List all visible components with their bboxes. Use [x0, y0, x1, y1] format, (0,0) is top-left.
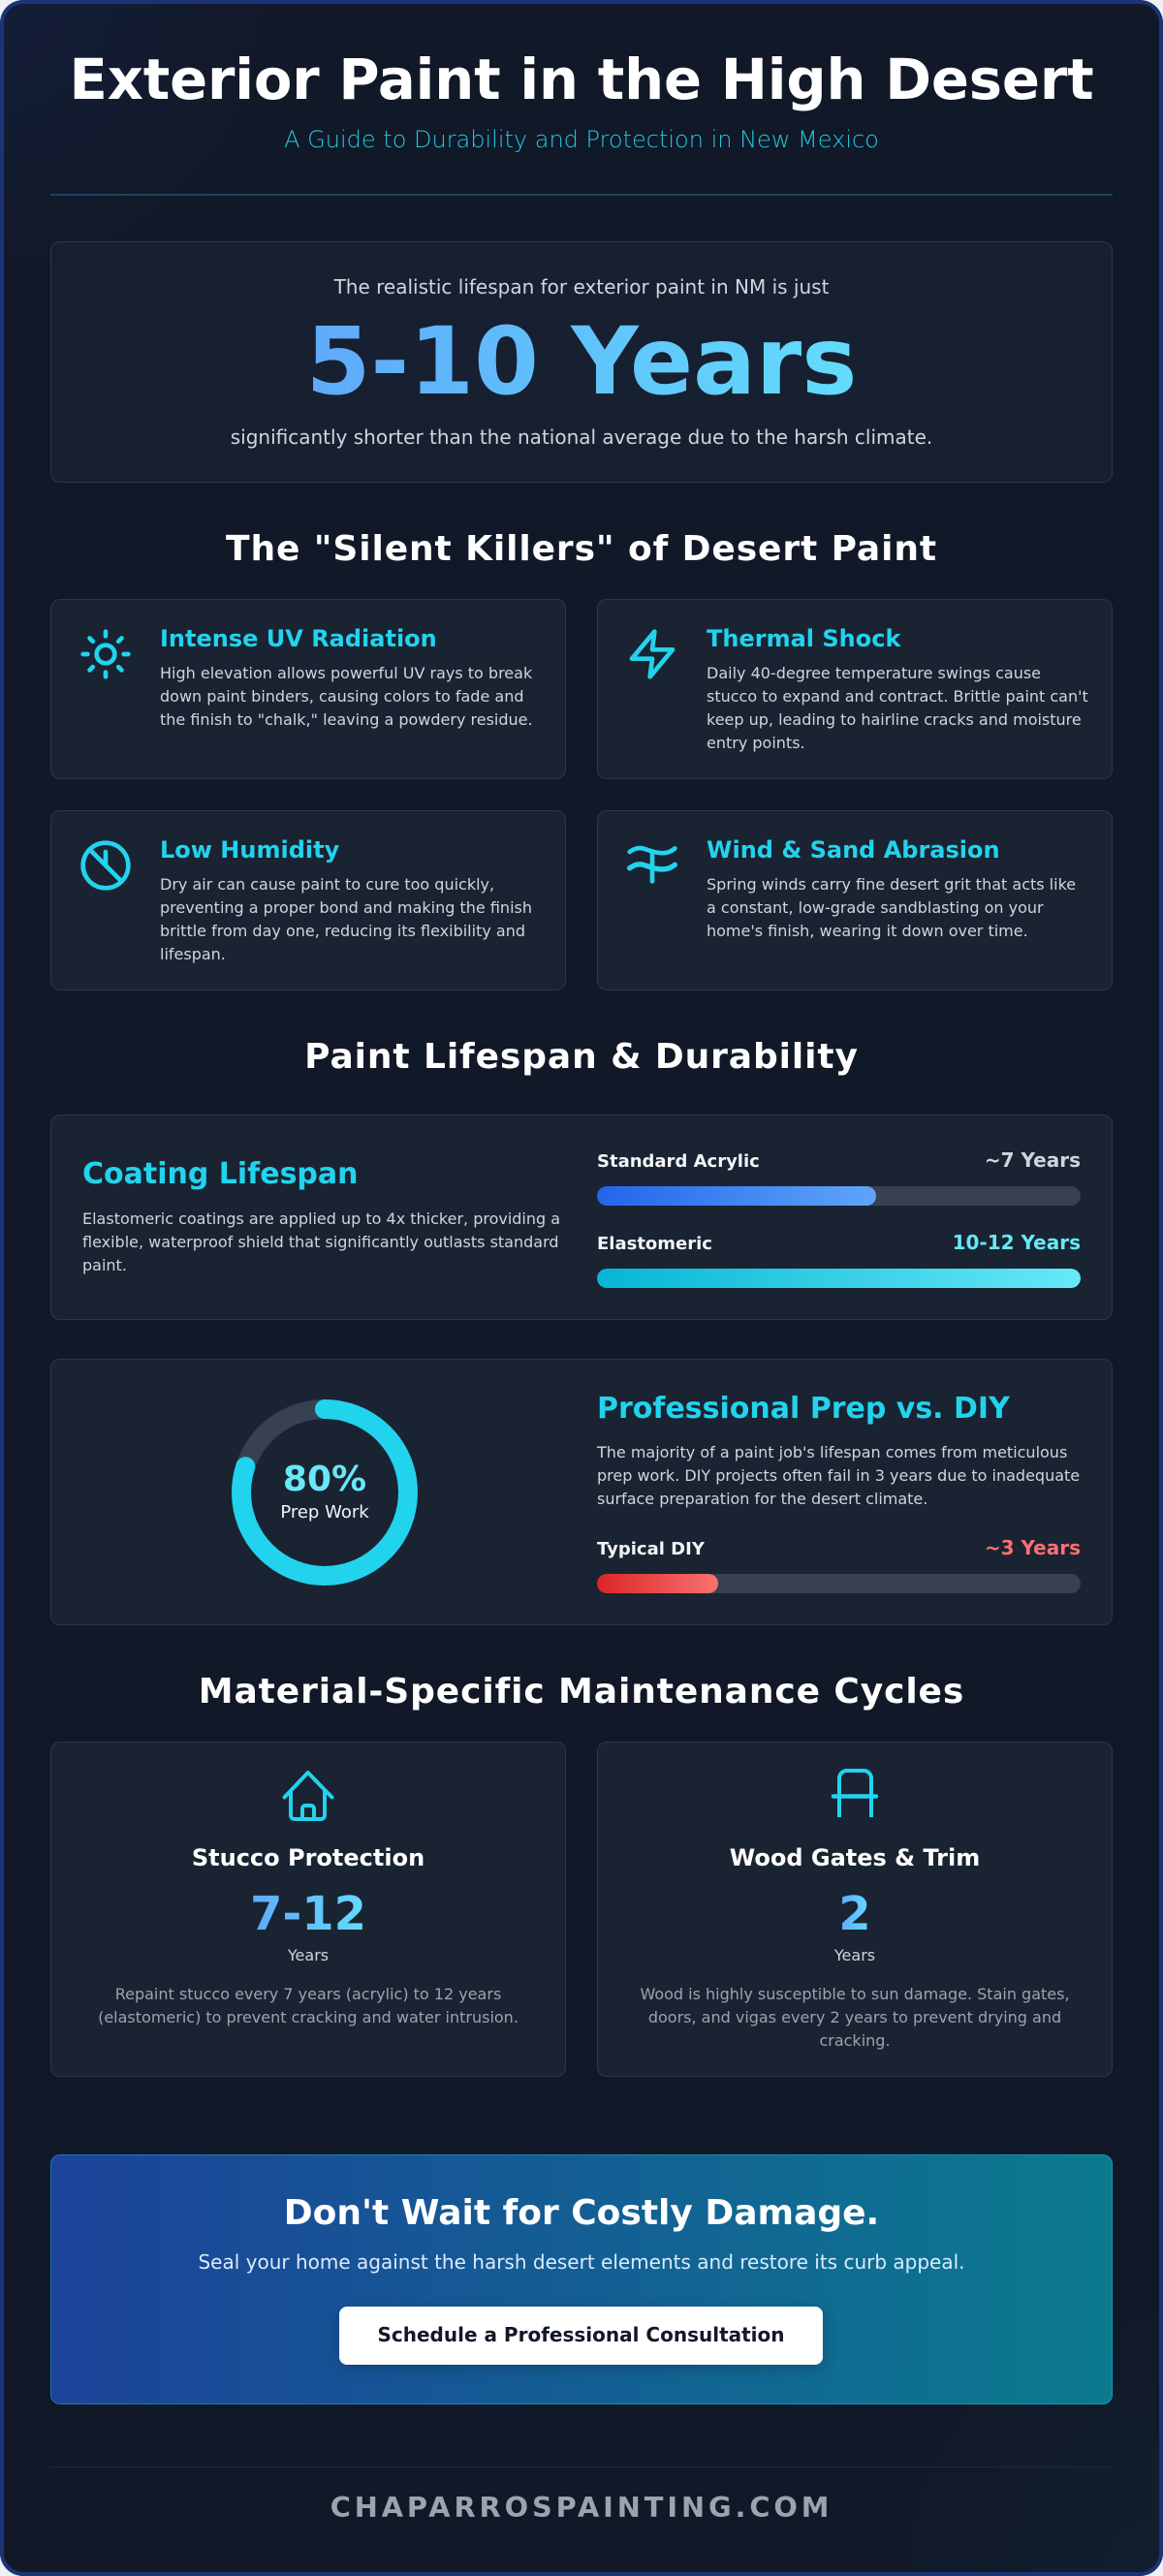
bar value: elastomeric: 10-12 Years	[953, 1231, 1081, 1254]
hero caption: significantly shorter than the national average due to the harsh climate.	[231, 425, 932, 449]
card text: Daily 40-degree temperature swings cause	[707, 664, 1041, 682]
panel heading: Professional Prep vs. DIY	[597, 1392, 1010, 1426]
panel: stucco protection	[50, 1742, 566, 2077]
call to action text: Seal your home against the harsh desert elements and restore its curb appeal.	[198, 2250, 965, 2274]
heading: maintenance cycles: Material-Specific Maintenance Cycles	[199, 1672, 964, 1712]
panel text: surface preparation for the desert climate.	[597, 1490, 927, 1508]
button	[339, 2307, 823, 2365]
panel text	[597, 1443, 1080, 1508]
card text	[707, 875, 1076, 940]
card text	[707, 664, 1088, 752]
icon: house	[282, 1770, 334, 1821]
footer divider	[50, 2466, 1113, 2467]
heading: silent killers: The "Silent Killers" of Desert Paint	[226, 529, 937, 569]
interval number: 2	[838, 1887, 871, 1941]
card text	[160, 664, 533, 729]
card text: High elevation allows powerful UV rays to break	[160, 664, 532, 682]
bar: typical DIY	[597, 1574, 1081, 1593]
card text: down paint binders, causing colors to fade and	[160, 687, 523, 706]
panel: coating lifespan	[50, 1115, 1113, 1320]
header divider	[50, 194, 1113, 196]
card text: Dry air can cause paint to cure too quickly,	[160, 875, 494, 894]
panel: low humidity	[50, 810, 566, 990]
card heading: Wind & Sand Abrasion	[707, 836, 1000, 864]
title: Exterior Paint in the High Desert	[70, 47, 1093, 112]
interval number: 7-12	[250, 1887, 366, 1941]
card text	[640, 1985, 1070, 2050]
card text: doors, and vigas every 2 years to prevent drying and	[648, 2008, 1061, 2026]
heading: paint lifespan: Paint Lifespan & Durability	[304, 1037, 859, 1077]
panel text: The majority of a paint job's lifespan comes from meticulous	[597, 1443, 1067, 1461]
bar value: standard acrylic: ~7 Years	[985, 1148, 1081, 1172]
icon: gate	[832, 1769, 878, 1817]
bar: standard acrylic	[597, 1186, 1081, 1206]
card heading: Intense UV Radiation	[160, 625, 437, 652]
interval unit: Years	[288, 1946, 329, 1964]
panel: intense UV radiation	[50, 599, 566, 779]
panel text	[82, 1209, 560, 1274]
card text: Spring winds carry fine desert grit that acts like	[707, 875, 1076, 894]
icon: lightning bolt	[630, 629, 675, 679]
call to action heading: Don't Wait for Costly Damage.	[284, 2193, 879, 2233]
panel: wind and sand abrasion	[597, 810, 1113, 990]
card text: (elastomeric) to prevent cracking and water intrusion.	[98, 2008, 519, 2026]
panel: wood gates and trim	[597, 1742, 1113, 2077]
donut chart: 80% prep work: Prep Work	[280, 1502, 369, 1523]
bar: elastomeric	[597, 1269, 1081, 1288]
panel text: flexible, waterproof shield that significantly outlasts standard	[82, 1233, 559, 1251]
panel: professional prep vs DIY	[50, 1359, 1113, 1625]
card text: keep up, leading to hairline cracks and moisture	[707, 710, 1082, 729]
card text: cracking.	[819, 2031, 891, 2050]
icon: wind waves	[627, 845, 677, 884]
donut chart: 80% prep work: 80%	[283, 1460, 366, 1499]
card text: preventing a proper bond and making the finish	[160, 898, 532, 917]
bar value: typical DIY: ~3 Years	[985, 1536, 1081, 1559]
icon: crossed clock	[80, 840, 131, 891]
card text: Repaint stucco every 7 years (acrylic) to 12 years	[115, 1985, 501, 2003]
card text: brittle from day one, reducing its flexibility and	[160, 922, 525, 940]
donut chart: 80% prep work	[232, 1399, 418, 1586]
panel text: paint.	[82, 1256, 127, 1274]
card text: entry points.	[707, 734, 805, 752]
bar label: elastomeric: Elastomeric	[597, 1234, 712, 1254]
card text: lifespan.	[160, 945, 226, 963]
hero intro text: The realistic lifespan for exterior paint in NM is just	[334, 275, 829, 298]
panel: thermal shock	[597, 599, 1113, 779]
bar label: standard acrylic: Standard Acrylic	[597, 1151, 760, 1172]
card heading: Low Humidity	[160, 836, 339, 864]
panel: lifespan hero	[50, 241, 1113, 483]
bar label: typical DIY: Typical DIY	[597, 1539, 705, 1559]
card text	[160, 875, 532, 963]
subtitle: A Guide to Durability and Protection in New Mexico	[284, 126, 879, 153]
footer website: CHAPARROSPAINTING.COM	[330, 2491, 833, 2524]
panel: call to action	[50, 2154, 1113, 2404]
icon: sun	[80, 629, 131, 679]
button: Schedule a Professional Consultation	[377, 2323, 785, 2346]
card text	[98, 1985, 519, 2026]
card heading: Thermal Shock	[707, 625, 900, 652]
hero number: 5-10 Years	[306, 307, 857, 416]
card heading: Wood Gates & Trim	[730, 1844, 980, 1871]
card text: the finish to "chalk," leaving a powdery residue.	[160, 710, 533, 729]
card text: a constant, low-grade sandblasting on your	[707, 898, 1044, 917]
card text: stucco to expand and contract. Brittle paint can't	[707, 687, 1088, 706]
panel heading: Coating Lifespan	[82, 1157, 359, 1191]
card text: Wood is highly susceptible to sun damage. Stain gates,	[640, 1985, 1070, 2003]
panel text: Elastomeric coatings are applied up to 4x thicker, providing a	[82, 1209, 560, 1228]
interval unit: Years	[834, 1946, 875, 1964]
panel text: prep work. DIY projects often fail in 3 years due to inadequate	[597, 1466, 1080, 1485]
card heading: Stucco Protection	[192, 1844, 424, 1871]
card text: home's finish, wearing it down over time.	[707, 922, 1028, 940]
